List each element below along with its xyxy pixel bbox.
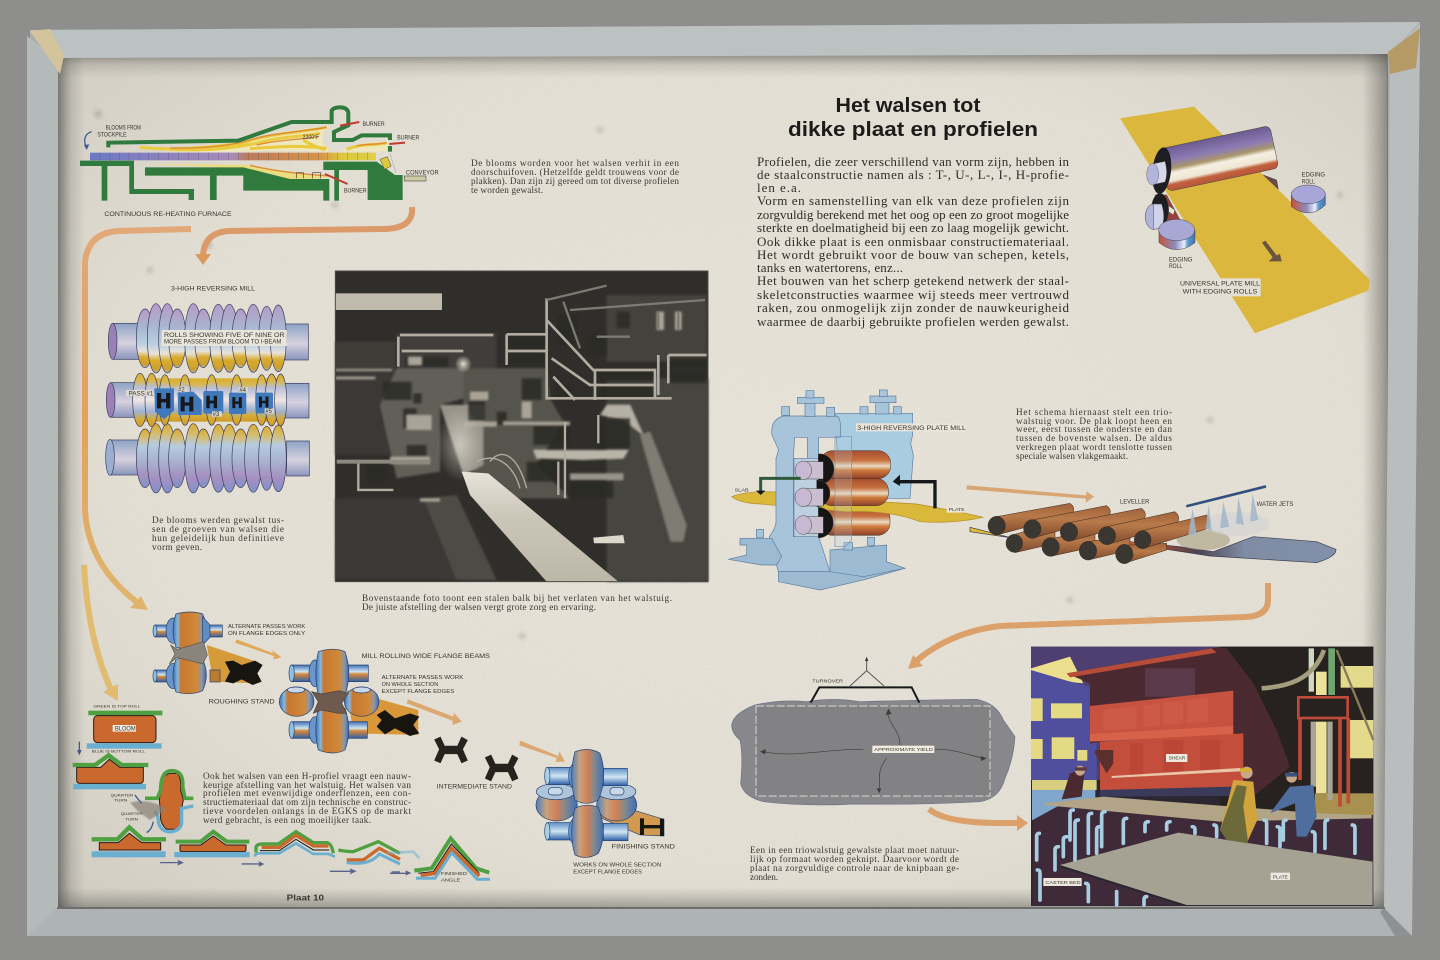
stand labels: EXCEPT FLANGE EDGES — [382, 689, 455, 695]
furnace labels: BLOOMS FROM — [106, 125, 141, 131]
intermediate stand beams — [434, 737, 518, 790]
photo caption: Bovenstaande foto toont een stalen balk bij het verlaten van het walstuig. — [362, 593, 672, 603]
text: plate shearing: lijk op formaat worden geknipt. Daarvoor wordt de — [750, 854, 959, 864]
text: blooms reheating — [471, 158, 679, 195]
intro text block: Profielen, die zeer verschillend van vorm zijn, hebben in — [757, 154, 1070, 169]
angle section: third to fifth steps — [92, 827, 400, 864]
diagram: intermediate and finishing stands — [387, 699, 676, 883]
angle section: bloom step: GREEN IS TOP ROLL — [93, 704, 142, 709]
painting: shear and caster bed — [1031, 647, 1373, 906]
middle roll — [106, 373, 309, 427]
bottom roll — [106, 424, 309, 493]
text: H-profiel: werd gebracht, is een nog moeilijker taak. — [203, 815, 371, 825]
approximate yield label — [872, 746, 934, 753]
text: H-profiel: keurige afstelling van het walstuig. Het walsen van — [203, 780, 411, 790]
shear machine — [1067, 647, 1290, 797]
angle section: quarter turn — [111, 771, 193, 833]
diagram: wide flange stands, left — [73, 612, 490, 902]
arrow: furnace to 3-high mill — [195, 207, 412, 265]
text: trio mill explanation: tussen de bovenste walsen. De aldus — [1016, 433, 1172, 443]
top roll — [108, 304, 308, 373]
stand labels — [209, 624, 490, 705]
photo caption — [362, 593, 672, 612]
arrow: intermediate to finishing — [519, 741, 565, 762]
arrow: plate to shear — [929, 809, 1028, 831]
labels: EDGING — [1169, 257, 1193, 263]
labels: EDGING — [1302, 172, 1325, 178]
intro text block: tanks en watertorens, enz... — [757, 260, 903, 275]
mill labels: #2 — [178, 388, 185, 394]
angle section: second step — [73, 755, 148, 789]
title: dikke plaat en profielen — [788, 118, 1038, 141]
finishing stand — [536, 750, 664, 857]
text: blooms reheating: doorschuifoven. (Hetzelfde geldt trouwens voor de — [471, 167, 679, 177]
photo caption: De juiste afstelling der walsen vergt grote zorg en ervaring. — [362, 602, 596, 612]
stand labels: ON FLANGE EDGES ONLY — [228, 631, 306, 637]
turnover lifting gear: TURNOVER — [812, 678, 843, 684]
text: plate shearing: plaat na zorgvuldige controle naar de knipbaan ge- — [750, 863, 959, 873]
painting labels: CASTER BED — [1045, 880, 1081, 886]
mill labels: PASS #1 — [129, 391, 154, 397]
workers — [1062, 766, 1317, 843]
plate — [732, 699, 1015, 805]
text: trio mill explanation — [1016, 407, 1172, 461]
title: Het walsen tot — [836, 94, 981, 117]
caster rollers — [1037, 810, 1355, 905]
stand labels: ALTERNATE PASSES WORK — [228, 624, 306, 630]
text: H-profiel: Ook het walsen van een H-profiel vraagt een nauw- — [203, 771, 411, 781]
labels: WATER JETS — [1257, 502, 1293, 508]
burners and details — [84, 122, 426, 184]
finishing labels: WORKS ON WHOLE SECTION — [573, 863, 661, 869]
furnace labels — [97, 122, 439, 218]
intro text block: len e.a. — [757, 180, 801, 195]
angle section: quarter turn: QUARTER — [111, 792, 133, 797]
furnace labels: CONTINUOUS RE-HEATING FURNACE — [104, 212, 232, 218]
photo top-left sign — [335, 293, 442, 310]
mill housing back — [835, 390, 913, 498]
painting labels: SHEAR — [1169, 756, 1186, 762]
blooms — [90, 153, 376, 160]
painting labels — [1043, 754, 1290, 886]
hydraulic press column — [1298, 697, 1348, 807]
passes — [154, 388, 273, 419]
labels: 3-HIGH REVERSING PLATE MILL — [857, 426, 967, 432]
labels — [1120, 499, 1293, 508]
slab and plate — [732, 492, 983, 522]
direction arrows — [756, 475, 935, 508]
sky and factory — [1031, 647, 1373, 820]
intro text block: Vorm en samenstelling van elk van deze profielen zijn — [757, 193, 1070, 208]
angle section: quarter turn: QUARTER — [121, 811, 143, 816]
hot plate — [970, 527, 1336, 563]
diagram: leveller and water jets — [967, 485, 1336, 564]
finished angle: FINISHED — [441, 871, 468, 876]
text: blooms reheating: plakken). Dan zijn zij gereed om tot diverse profielen — [471, 176, 679, 186]
diagram: universal plate mill — [1120, 107, 1370, 333]
diagram: 3-high reversing plate mill — [728, 390, 983, 590]
text: H-profiel — [203, 771, 411, 825]
arrow: mill to leveller — [967, 485, 1094, 503]
furnace labels: 2200°F — [303, 135, 320, 141]
stand labels: MILL ROLLING WIDE FLANGE BEAMS — [362, 654, 490, 660]
finishing labels: FINISHING STAND — [612, 844, 676, 850]
finishing labels: EXCEPT FLANGE EDGES — [573, 869, 642, 875]
labels: WITH EDGING ROLLS — [1183, 290, 1257, 296]
text: trio mill explanation: walstuig voor. De plak loopt heen en — [1016, 416, 1172, 426]
intro text block: de staalconstructie namen als : T-, U-, L-, I-, H-profie- — [757, 167, 1069, 182]
photo machinery detail — [335, 312, 707, 502]
text: blooms gewalst: De blooms werden gewalst tus- — [152, 515, 284, 525]
diagram: plate and approximate yield — [732, 657, 1015, 805]
stand labels: ON WHOLE SECTION — [382, 682, 438, 688]
small process arrows — [160, 860, 400, 874]
bottom roll — [820, 506, 890, 535]
intro text block: waarmee de daarbij gebruikte profielen werden gewalst. — [757, 314, 1069, 329]
roll necks and chocks — [795, 454, 834, 538]
stand labels: ALTERNATE PASSES WORK — [382, 675, 464, 681]
text: blooms gewalst: vorm geven. — [152, 542, 202, 552]
text: plate shearing: zonden. — [750, 872, 778, 882]
text: trio mill explanation: speciale walsen vlakgemaakt. — [1016, 451, 1128, 461]
furnace walls — [80, 107, 403, 201]
text: blooms reheating: te worden gewalst. — [471, 185, 543, 195]
intro text block: zorgvuldig berekend met het oog op een zo groot mogelijke — [757, 207, 1069, 222]
mill rolling wide flange beams — [279, 649, 418, 753]
text: plate shearing: Een in een triowalstuig gewalste plaat moet natuur- — [750, 845, 959, 855]
finished angle: ANGLE — [441, 878, 460, 883]
labels: SLAB — [735, 487, 749, 492]
flames — [138, 126, 388, 180]
photo: steel beam leaving the mill — [335, 271, 708, 582]
main roller — [1147, 126, 1279, 195]
labels: LEVELLER — [1120, 499, 1150, 505]
text: blooms gewalst: hun geleidelijk hun definitieve — [152, 533, 284, 543]
arrow: mill to intermediate — [407, 699, 462, 725]
angle section: bloom step: BLUE IS BOTTOM ROLL — [92, 748, 146, 753]
rollers — [988, 503, 1210, 564]
glowing beam — [462, 472, 618, 582]
angle section: bloom step: BLOOM — [115, 727, 136, 733]
text: H-profiel: tieve voordelen onlangs in de EGKS op de markt — [203, 806, 411, 816]
intro text block: raken, zou onmogelijk zijn zonder de nauwkeurigheid — [757, 300, 1070, 315]
mill labels: #3 — [213, 412, 220, 418]
diagram: continuous re-heating furnace — [80, 107, 439, 218]
labels — [1169, 172, 1325, 296]
turnover lifting gear — [811, 657, 919, 703]
labels: PLATE — [949, 507, 965, 513]
labels: UNIVERSAL PLATE MILL — [1180, 281, 1261, 287]
furnace labels: BURNER — [397, 136, 420, 142]
text: H-profiel: profielen met evenwijdige onderflenzen, een con- — [203, 788, 411, 798]
translucent right column — [835, 437, 852, 547]
furnace labels: CONVEYOR — [406, 170, 439, 176]
text: H-profiel: structiemateriaal dat om zijn technische en construc- — [203, 797, 411, 807]
intermediate stand beams: INTERMEDIATE STAND — [437, 784, 513, 790]
water jets — [1188, 493, 1258, 535]
angle section: quarter turn: TURN — [114, 797, 127, 802]
labels: ROLL — [1302, 179, 1316, 185]
text: trio mill explanation: Het schema hiernaast stelt een trio- — [1016, 407, 1172, 417]
caster bed and plates — [1033, 797, 1373, 905]
mill labels: #4 — [239, 388, 247, 394]
mill labels: MORE PASSES FROM BLOOM TO I-BEAM — [164, 340, 281, 346]
furnace labels: STOCKPILE — [97, 132, 127, 138]
text: blooms gewalst: sen de groeven van walsen die — [152, 524, 284, 534]
upper rolls — [820, 451, 891, 506]
photo railings — [337, 286, 707, 498]
intro text block: skeletconstructies waarmee wij steeds meer vertrouwd — [757, 287, 1070, 302]
angle section: bloom step — [77, 704, 162, 755]
diagram: 3-high reversing mill — [106, 287, 309, 493]
direction arrow — [1262, 241, 1282, 261]
arrow: roughing to mill — [235, 639, 282, 659]
mill housing front — [728, 391, 905, 590]
title — [788, 94, 1038, 141]
finishing labels — [573, 844, 676, 875]
page number: Plaat 10 — [287, 892, 324, 902]
mill labels: #5 — [265, 409, 273, 415]
text: plate shearing — [750, 845, 959, 882]
yellow plate — [1120, 107, 1370, 333]
lower roller and edging rolls — [1145, 175, 1325, 250]
text: trio mill explanation: verkregen plaat wordt tenslotte tussen — [1016, 442, 1172, 452]
labels: ROLL — [1169, 264, 1183, 270]
text: trio mill explanation: weer, eerst tussen de onderste en dan — [1016, 424, 1172, 434]
stand labels: ROUGHING STAND — [209, 699, 275, 705]
finished angle — [387, 838, 490, 883]
arrow: leveller to plate — [908, 583, 1268, 669]
text: blooms reheating: De blooms worden voor het walsen verhit in een — [471, 158, 679, 168]
roughing stand — [153, 612, 257, 694]
mill labels: ROLLS SHOWING FIVE OF NINE OR — [164, 333, 285, 339]
yield arrows — [760, 709, 987, 793]
intro text block: Het bouwen van het scherp getekend netwerk der staal- — [757, 273, 1069, 288]
mill labels — [126, 330, 287, 418]
text: blooms gewalst — [152, 515, 284, 552]
intro text block: sterkte en doelmatigheid bij een zo laag mogelijk gewicht. — [757, 220, 1069, 235]
diagram: 3-high reversing mill: 3-HIGH REVERSING MILL — [171, 287, 256, 293]
intro text block: Ook dikke plaat is een onmisbaar constructiemateriaal. — [757, 234, 1069, 249]
arrow: furnace to angle sections — [84, 229, 191, 701]
intro text block — [757, 154, 1070, 329]
intro text block: Het wordt gebruikt voor de bouw van schepen, ketels, — [757, 247, 1069, 262]
painting labels: PLATE — [1273, 874, 1289, 880]
labels — [735, 423, 967, 513]
furnace labels: BURNER — [344, 188, 367, 194]
angle section: quarter turn: TURN — [125, 816, 138, 821]
approximate yield label: APPROXIMATE YIELD — [874, 747, 933, 753]
furnace labels: BURNER — [363, 122, 385, 128]
